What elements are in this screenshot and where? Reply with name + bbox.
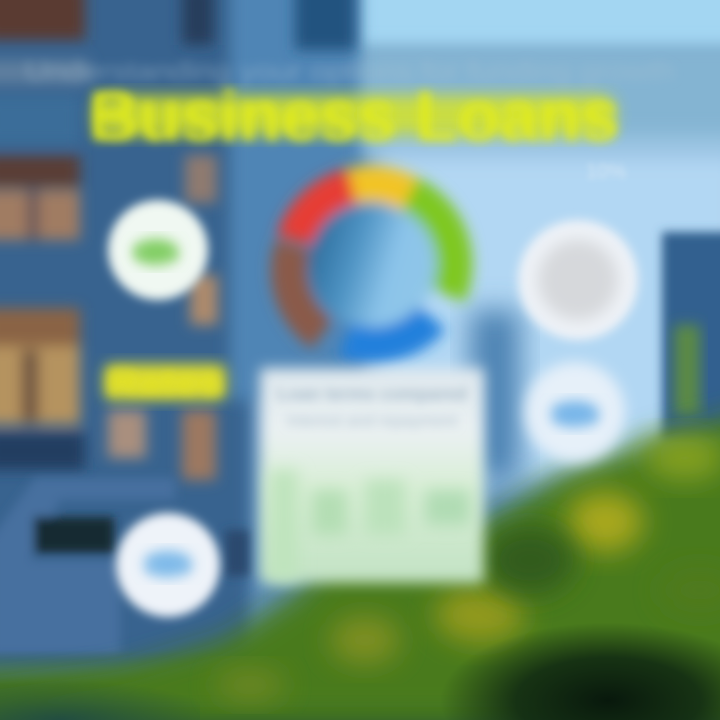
callout circle: blue right xyxy=(525,362,625,462)
callout circle: green: 60% xyxy=(134,240,178,265)
panel green chart xyxy=(270,470,470,580)
small label top right of chart: 10% xyxy=(586,161,626,183)
segment: red xyxy=(294,185,358,240)
callout circle: blue lower left: 25% xyxy=(146,552,190,577)
segment: blue xyxy=(345,318,432,345)
foliage xyxy=(0,410,720,720)
panel text lines: Interest and repayment xyxy=(287,413,458,430)
panel heading lines: Loan terms compared xyxy=(277,384,467,404)
title: Business Loans xyxy=(89,77,619,155)
callout circle: grey xyxy=(518,220,638,340)
callout circle: blue right: 30% xyxy=(553,402,597,427)
panel: details xyxy=(260,368,484,583)
donut chart xyxy=(289,184,454,345)
building entrance: lower left xyxy=(0,478,249,655)
yellow label: Rates xyxy=(108,364,222,402)
callout circle: green xyxy=(108,200,208,300)
segment: yellow xyxy=(352,184,415,198)
donut centre xyxy=(308,201,436,329)
segment: brown xyxy=(289,245,322,334)
subtitle line: Understanding your options for funding growth xyxy=(25,56,675,86)
building windows: left column xyxy=(0,0,218,480)
callout circle: blue lower left xyxy=(116,513,220,617)
segment: green xyxy=(410,194,454,295)
